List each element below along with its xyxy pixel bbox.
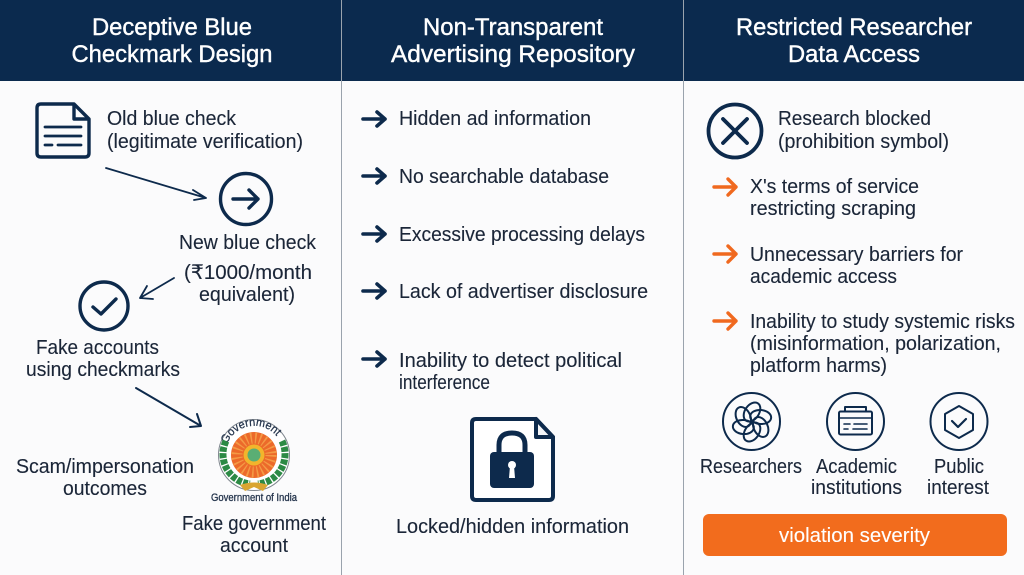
button: violation severity	[703, 514, 1007, 556]
text: scam outcomes: Scam/impersonation	[16, 456, 194, 478]
list item: systemic risks: (misinformation, polarization,	[750, 333, 1001, 355]
list item: unnecessary barriers	[714, 244, 963, 288]
label: academic institutions: institutions	[811, 477, 902, 499]
icon: government emblem: Government of India	[211, 492, 298, 504]
heading: deceptive blue checkmark design	[72, 14, 272, 68]
icon: check in circle	[80, 282, 128, 330]
heading: restricted researcher data access: Data Access	[788, 41, 920, 68]
list item: terms of service: restricting scraping	[750, 198, 916, 220]
icon: public interest shield	[930, 393, 988, 450]
text: fake government account: Fake government	[182, 513, 326, 535]
list item: terms of service	[714, 176, 919, 220]
arrow: new check to fake accounts	[140, 278, 174, 299]
list item: inability to detect political interference	[363, 350, 622, 394]
icon: government emblem: Government	[221, 420, 282, 442]
text: new blue check	[179, 232, 317, 306]
text: fake accounts: using checkmarks	[26, 359, 180, 381]
text: new blue check: (₹1000/month	[184, 262, 312, 284]
text: research blocked	[778, 108, 949, 153]
heading: non-transparent advertising repository: Non-Transparent	[423, 14, 603, 41]
list item: inability to detect political interference: Inability to detect political	[399, 350, 622, 372]
text: research blocked: (prohibition symbol)	[778, 131, 949, 153]
list item: inability to detect political interference: interference	[399, 372, 490, 394]
panel: deceptive blue checkmark design	[16, 14, 326, 557]
list item: unnecessary barriers: academic access	[750, 266, 897, 288]
panel: non-transparent advertising repository	[363, 14, 648, 538]
icon: academic institutions	[827, 393, 884, 450]
text: fake government account: account	[220, 535, 288, 557]
list item: systemic risks: Inability to study systemic risks	[750, 311, 1015, 333]
list item: terms of service: X's terms of service	[750, 176, 919, 198]
arrow: fake accounts to outcomes	[136, 388, 201, 427]
heading: non-transparent advertising repository: Advertising Repository	[391, 41, 635, 68]
list item: no searchable database: No searchable database	[399, 166, 609, 188]
icon: arrow in circle	[220, 174, 272, 224]
text: fake accounts: Fake accounts	[36, 337, 159, 359]
label: academic institutions	[811, 456, 902, 499]
label: public interest: interest	[927, 477, 989, 499]
caption: locked hidden information: Locked/hidden information	[396, 516, 629, 538]
icon: locked document	[472, 419, 553, 500]
icon: prohibition x	[708, 104, 762, 158]
list item: systemic risks	[714, 311, 1015, 377]
list item: hidden ad information: Hidden ad information	[399, 108, 591, 130]
text: old blue check: Old blue check	[107, 108, 237, 130]
list item: systemic risks: platform harms)	[750, 355, 887, 377]
heading: restricted researcher data access: Restricted Researcher	[736, 14, 972, 41]
text: new blue check: equivalent)	[199, 284, 295, 306]
icon: document	[37, 104, 89, 157]
text: old blue check	[107, 108, 303, 153]
text: fake government account	[182, 513, 326, 557]
arrow: old to new check	[106, 168, 206, 200]
icon: government emblem	[211, 419, 298, 504]
icon: researchers	[723, 393, 780, 450]
label: public interest: Public	[934, 456, 984, 478]
text: new blue check: New blue check	[179, 232, 317, 254]
heading: deceptive blue checkmark design: Checkmark Design	[72, 41, 272, 68]
label: researchers: Researchers	[700, 456, 802, 478]
label: public interest	[927, 456, 989, 499]
button: violation severity: violation severity	[779, 525, 930, 547]
heading: deceptive blue checkmark design: Deceptive Blue	[92, 14, 252, 41]
text: research blocked: Research blocked	[778, 108, 931, 130]
list item: unnecessary barriers: Unnecessary barriers for	[750, 244, 963, 266]
heading: non-transparent advertising repository	[391, 14, 635, 68]
list item: excessive processing delays: Excessive processing delays	[399, 224, 645, 246]
text: old blue check: (legitimate verification)	[107, 131, 303, 153]
heading: restricted researcher data access	[736, 14, 972, 68]
text: scam outcomes: outcomes	[63, 478, 147, 500]
text: fake accounts	[26, 337, 180, 381]
label: academic institutions: Academic	[816, 456, 897, 478]
panel: restricted researcher data access	[700, 14, 1015, 556]
list item: lack of advertiser disclosure: Lack of advertiser disclosure	[399, 281, 648, 303]
text: scam outcomes	[16, 456, 194, 500]
